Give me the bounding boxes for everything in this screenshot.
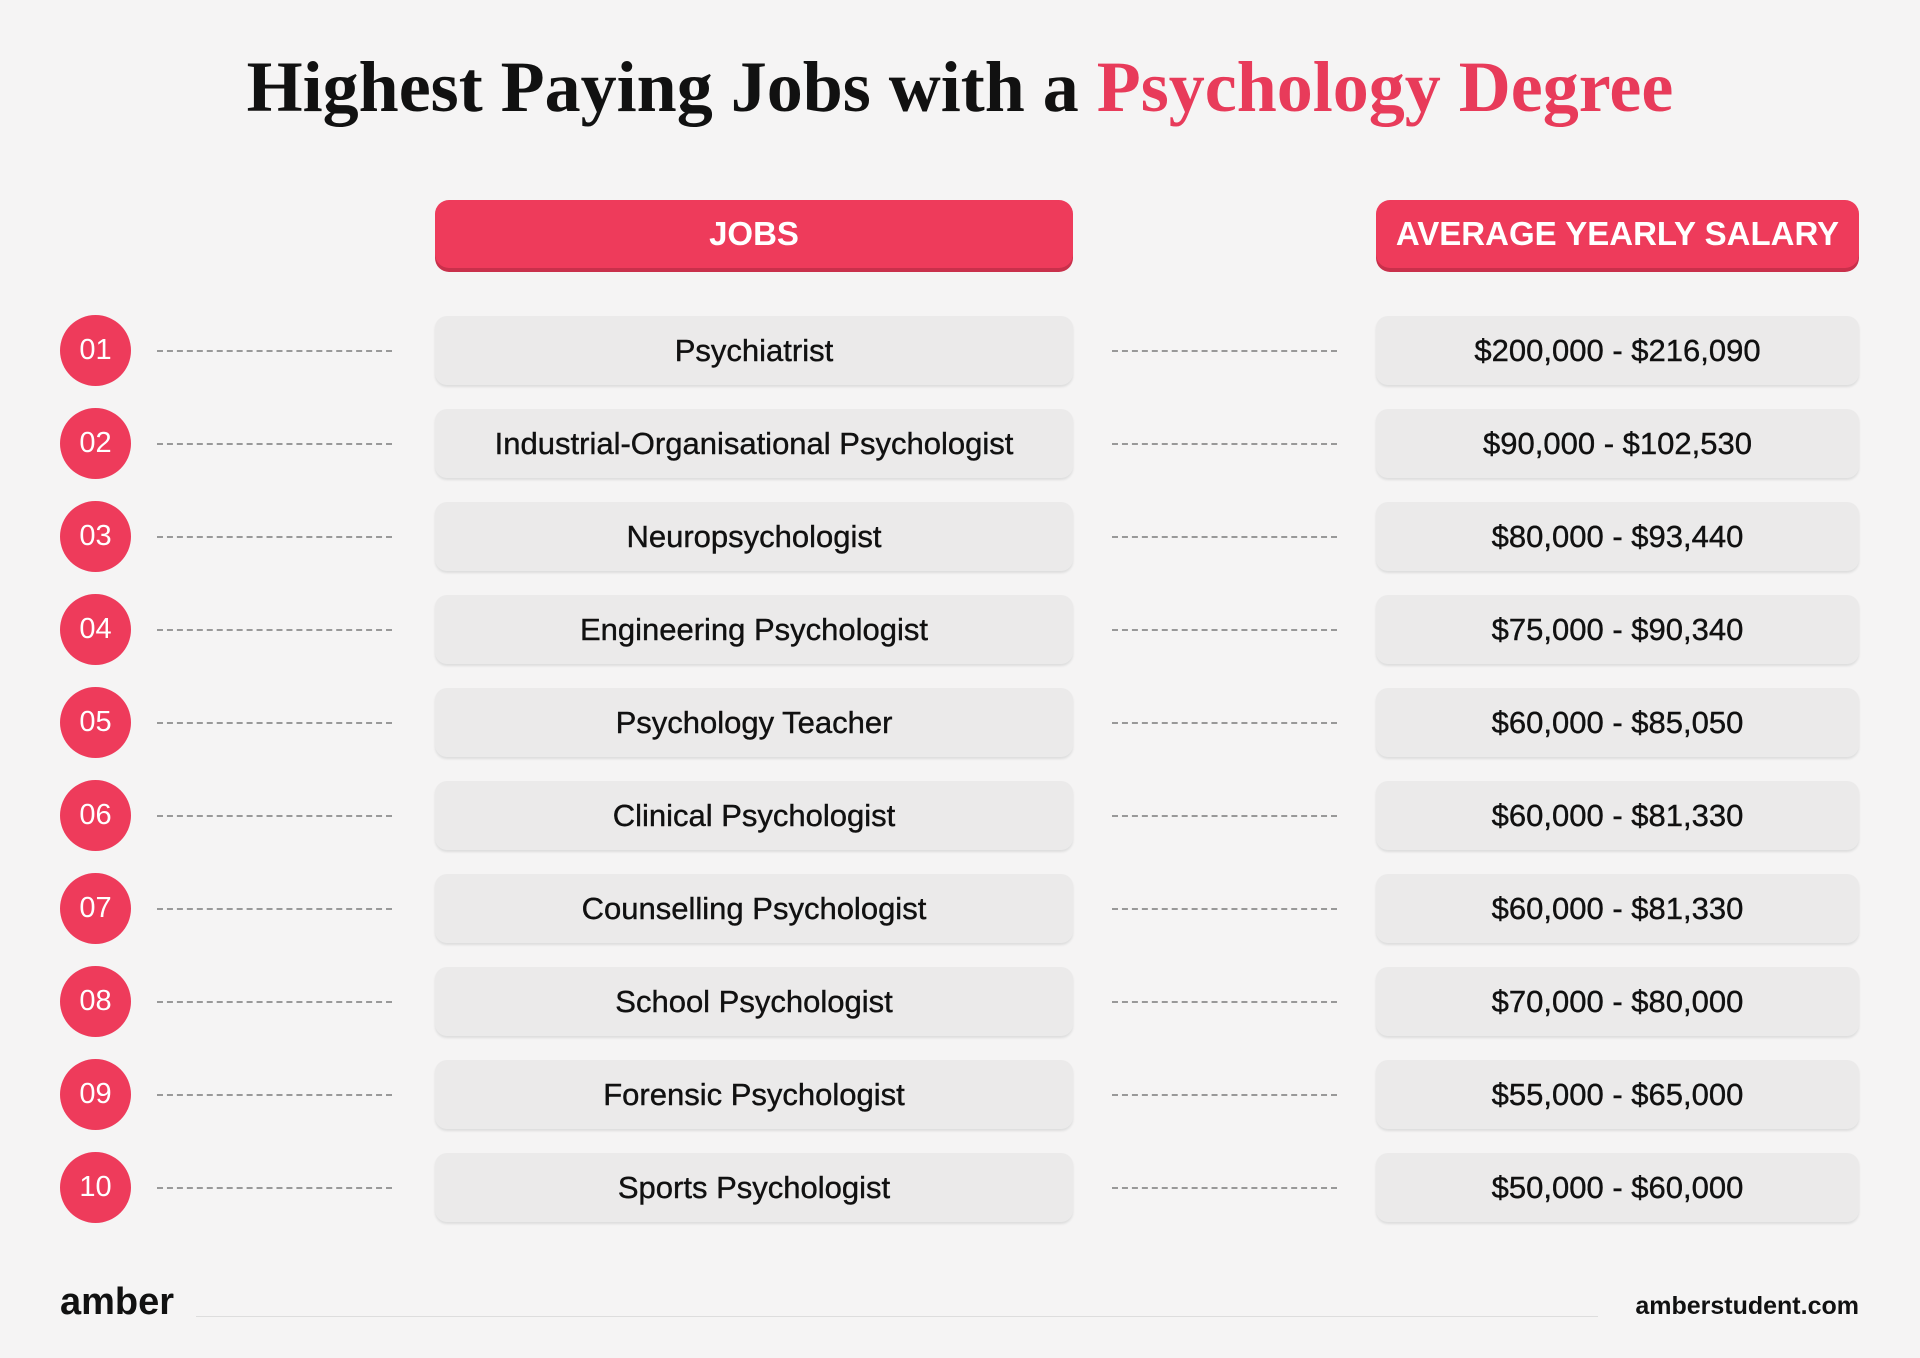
logo: amber: amber xyxy=(60,1281,174,1323)
row 07: Counselling Psychologist xyxy=(582,890,926,926)
row 06 xyxy=(60,780,1860,852)
row 06: Clinical Psychologist xyxy=(613,798,895,832)
row 01: $200,000 - $216,090 xyxy=(1474,332,1761,368)
row 10: $50,000 - $60,000 xyxy=(1492,1170,1743,1204)
row 07: 07 xyxy=(79,892,112,924)
row 03: 03 xyxy=(79,520,112,552)
row 10 xyxy=(60,1152,1860,1224)
row 09 xyxy=(60,1059,1860,1132)
row 02: Industrial-Organisational Psychologist xyxy=(495,426,1013,460)
row 09: Forensic Psychologist xyxy=(603,1076,905,1112)
row 03: $80,000 - $93,440 xyxy=(1492,518,1743,554)
row 08: School Psychologist xyxy=(615,984,893,1018)
row 05: $60,000 - $85,050 xyxy=(1492,704,1743,740)
row 01 xyxy=(60,315,1860,388)
footer url: amberstudent.com xyxy=(1635,1292,1859,1320)
row 04 xyxy=(60,594,1860,666)
row 01: 01 xyxy=(79,334,112,366)
row 03: Neuropsychologist xyxy=(626,518,882,554)
row 10: Sports Psychologist xyxy=(618,1170,890,1204)
row 04: $75,000 - $90,340 xyxy=(1492,612,1743,646)
row 05: 05 xyxy=(79,706,112,738)
row 07: $60,000 - $81,330 xyxy=(1492,890,1743,926)
row 09: $55,000 - $65,000 xyxy=(1492,1076,1743,1112)
row 02 xyxy=(60,408,1860,480)
row 04: 04 xyxy=(79,613,112,645)
row 01: Psychiatrist xyxy=(675,332,833,368)
row 02: 02 xyxy=(79,427,112,459)
row 06: 06 xyxy=(79,799,112,831)
row 08: 08 xyxy=(79,985,112,1017)
row 03 xyxy=(60,501,1860,574)
row 08 xyxy=(60,966,1860,1038)
table rows xyxy=(60,315,1860,1224)
row 10: 10 xyxy=(79,1171,112,1203)
row 07 xyxy=(60,873,1860,946)
row 06: $60,000 - $81,330 xyxy=(1492,798,1743,832)
title: Highest Paying Jobs with a Psychology Degree xyxy=(247,47,1673,127)
header: salary xyxy=(1376,200,1859,268)
row 05 xyxy=(60,687,1860,760)
header: salary: AVERAGE YEARLY SALARY xyxy=(1396,215,1839,252)
row 09: 09 xyxy=(79,1078,112,1110)
header: jobs xyxy=(435,200,1073,268)
header: jobs: JOBS xyxy=(709,215,799,252)
row 02: $90,000 - $102,530 xyxy=(1483,426,1752,460)
row 05: Psychology Teacher xyxy=(616,704,892,740)
row 08: $70,000 - $80,000 xyxy=(1492,984,1743,1018)
row 04: Engineering Psychologist xyxy=(580,612,928,646)
